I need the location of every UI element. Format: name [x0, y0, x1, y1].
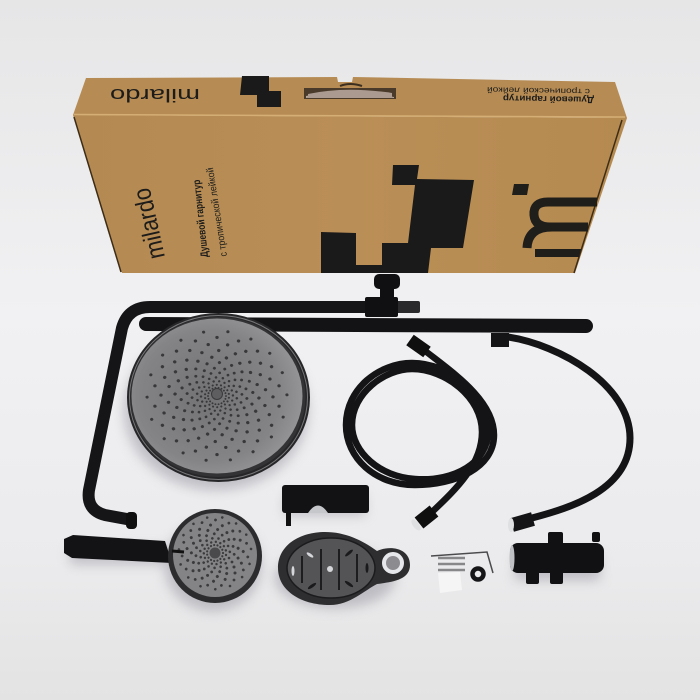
flap product text: с тропической лейкой: [487, 85, 590, 96]
wall bracket knob: [365, 274, 400, 317]
valve body: [510, 543, 604, 573]
box fold highlight: [74, 114, 625, 117]
hose top connector: [410, 340, 427, 352]
arm end: [126, 512, 137, 529]
spray face: [173, 513, 257, 597]
box front face: [73, 115, 627, 273]
slider button: [308, 506, 328, 513]
diverter valve: [510, 532, 604, 584]
rubber o-ring: [472, 568, 484, 580]
flap product text: [487, 85, 594, 105]
shadows: [70, 330, 600, 611]
mounting accessories: [431, 552, 493, 593]
box right edge: [574, 120, 622, 273]
handle: [64, 535, 172, 563]
soap dish: [278, 532, 410, 605]
flap product text: Душевой гарнитур: [502, 93, 594, 105]
selector notch: [172, 551, 184, 552]
handle cutout: [304, 84, 396, 99]
head rim: [168, 509, 262, 603]
second flexible hose: [491, 337, 630, 532]
coil white end face: [410, 518, 422, 532]
hand shower: [64, 509, 262, 603]
screws: [438, 558, 465, 570]
white end face: [508, 518, 514, 532]
sliding bracket: [282, 485, 369, 526]
cardboard box: [73, 76, 627, 273]
white wall plugs: [438, 572, 462, 593]
black block on flap: [240, 76, 281, 107]
nozzles: [143, 327, 291, 465]
L-shaped shower arm: [89, 301, 420, 529]
coiled black hose: [346, 340, 494, 532]
hose bottom connector: [419, 511, 434, 523]
tray slots: [302, 549, 357, 590]
white ring clip: [384, 554, 402, 572]
hose lower fitting: [512, 519, 533, 525]
straight riser rail: [146, 324, 586, 326]
rain shower head: [127, 313, 310, 482]
center cap: [212, 388, 222, 400]
hex wrench: [431, 552, 493, 573]
flap logo: milardo: [110, 85, 200, 105]
spray center: [210, 548, 220, 558]
front side logo: milardo: [128, 185, 171, 262]
threaded tip: [397, 301, 420, 313]
front product text: Душевой гарнитур: [191, 179, 211, 258]
logo m mark: [512, 184, 597, 257]
large black pixel graphic: [321, 165, 474, 273]
nozzle face: [132, 318, 302, 474]
valve white end: [510, 545, 514, 571]
box top flap: [73, 77, 627, 118]
drain holes: [292, 549, 368, 590]
hose end fitting: [491, 333, 509, 347]
dish inner tray: [287, 538, 375, 598]
front product text: с тропической лейкой: [205, 167, 230, 257]
box left edge: [74, 117, 121, 272]
spray holes: [175, 513, 255, 593]
front product text: [191, 167, 230, 258]
